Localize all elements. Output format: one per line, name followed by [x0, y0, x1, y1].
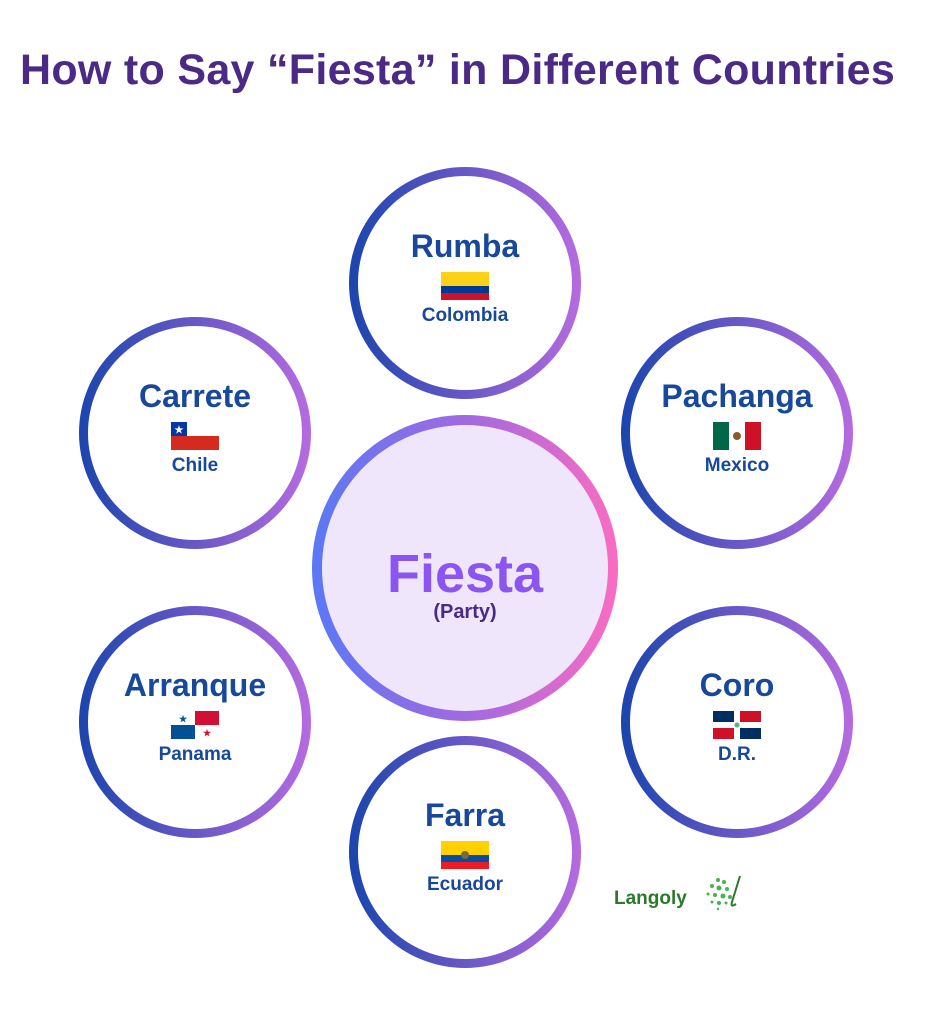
circle: Rumba Colombia: Rumba [411, 228, 519, 264]
circle: Arranque Panama: Panama [159, 744, 231, 765]
circle: Farra Ecuador: Farra [425, 797, 505, 833]
circle: Coro D.R. [621, 606, 853, 838]
flag: Dominican Republic [713, 711, 761, 739]
logo: Langoly [614, 876, 741, 910]
icon: globe dots [706, 876, 741, 910]
flag: Chile: ★ [175, 425, 184, 436]
circle: Arranque Panama [79, 606, 311, 838]
circle: Coro D.R.: D.R. [718, 744, 756, 765]
circle: Rumba Colombia: Colombia [422, 305, 508, 326]
circle: Carrete Chile: Chile [172, 455, 218, 476]
circle: Farra Ecuador: Ecuador [427, 874, 503, 895]
circle: Pachanga Mexico: Pachanga [661, 378, 813, 414]
flag: Panama [171, 711, 219, 739]
logo: Langoly: Langoly [614, 888, 687, 909]
flag: Panama: ★ [179, 714, 188, 724]
circle: Coro D.R.: Coro [700, 667, 774, 703]
circle: Arranque Panama: Arranque [124, 667, 266, 703]
flag: Panama: ★ [203, 728, 212, 738]
title: How to Say “Fiesta” in Different Countries [20, 46, 895, 94]
flag: Ecuador [441, 841, 489, 869]
circle: Carrete Chile [79, 317, 311, 549]
circle: Farra Ecuador [349, 736, 581, 968]
circle: Pachanga Mexico: Mexico [705, 455, 769, 476]
center circle: Fiesta [312, 415, 618, 721]
circle: Pachanga Mexico [621, 317, 853, 549]
center circle: Fiesta: Fiesta [387, 544, 543, 604]
flag: Chile [171, 422, 219, 450]
flag: Colombia [441, 272, 489, 300]
circle: Rumba Colombia [349, 167, 581, 399]
center circle: Fiesta: (Party) [433, 601, 497, 623]
circle: Carrete Chile: Carrete [139, 378, 251, 414]
flag: Mexico [713, 422, 761, 450]
